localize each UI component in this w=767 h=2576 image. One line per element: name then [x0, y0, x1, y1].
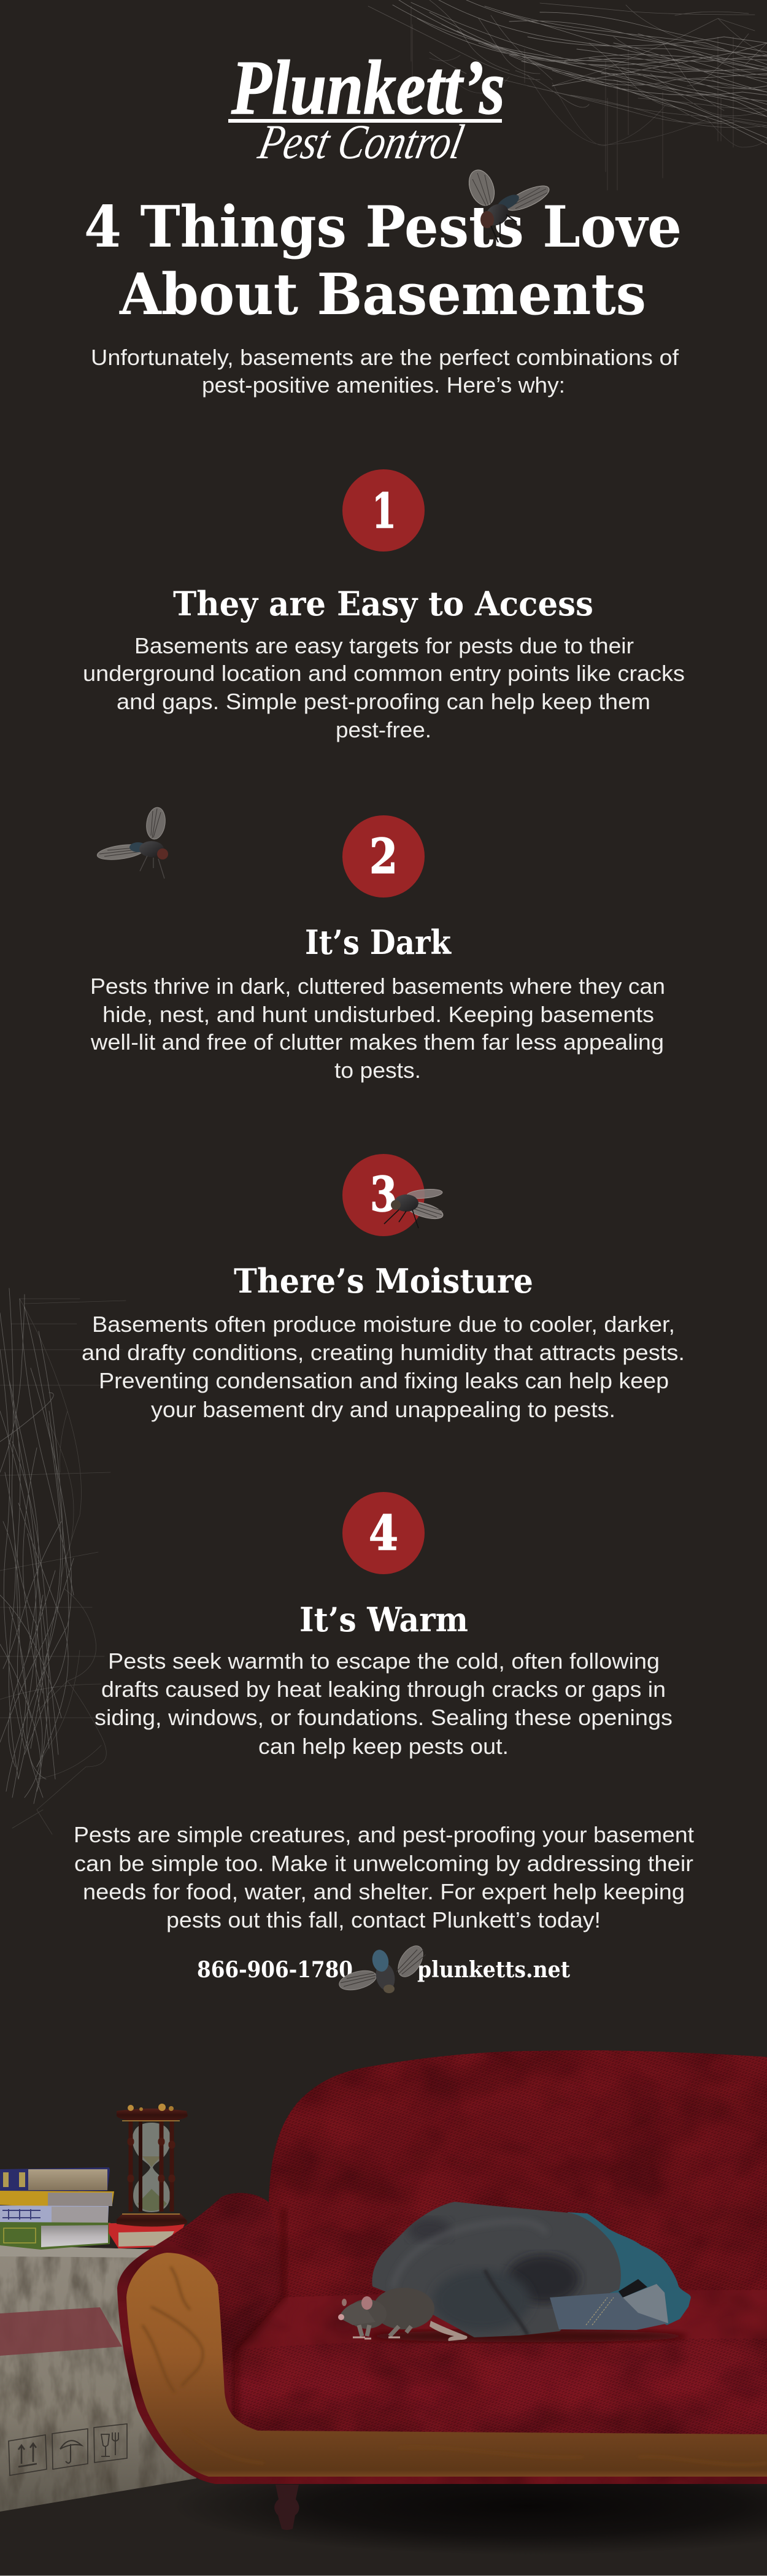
grey jacket	[372, 2202, 621, 2337]
body 3: your basement dry and unappealing to pests.	[151, 1397, 615, 1422]
contact website: plunketts.net	[417, 1957, 570, 1983]
body 1	[83, 633, 685, 742]
book: red	[109, 2223, 185, 2248]
contact phone: 866-906-1780	[197, 1957, 353, 1983]
body 1: Basements are easy targets for pests due to their	[134, 633, 634, 658]
icon: fly on title	[464, 166, 552, 242]
body 4: drafts caused by heat leaking through cracks or gaps in	[101, 1677, 666, 1702]
panel: reason 4	[94, 1492, 673, 1759]
number badge 3: 3	[370, 1167, 397, 1223]
sofa	[117, 2050, 767, 2530]
teal sweater	[568, 2212, 691, 2325]
closing text: pests out this fall, contact Plunkett’s today!	[166, 1907, 601, 1932]
number badge 4	[342, 1492, 425, 1574]
number badge 4: 4	[369, 1505, 398, 1561]
body 2: Pests thrive in dark, cluttered basements where they can	[90, 974, 665, 999]
heading 1: They are Easy to Access	[173, 584, 593, 623]
body 3: Basements often produce moisture due to cooler, darker,	[92, 1312, 675, 1337]
body 3: Preventing condensation and fixing leaks can help keep	[99, 1368, 669, 1393]
body 4: can help keep pests out.	[258, 1734, 509, 1759]
heading 4: It’s Warm	[299, 1600, 468, 1639]
book: yellow	[0, 2191, 114, 2207]
sofa back	[269, 2050, 767, 2313]
body 4	[94, 1648, 673, 1759]
body 2: well-lit and free of clutter makes them far less appealing	[90, 1029, 664, 1055]
heading 2: It’s Dark	[305, 923, 452, 962]
logo	[228, 45, 505, 169]
closing text: can be simple too. Make it unwelcoming by addressing their	[74, 1851, 693, 1876]
number badge 1: 1	[372, 483, 396, 539]
body 2: hide, nest, and hunt undisturbed. Keeping basements	[102, 1002, 654, 1027]
cobweb: left wall	[0, 1288, 126, 1834]
book: blue	[0, 2167, 110, 2192]
closing text	[74, 1822, 694, 1932]
logo: Pest Control	[253, 115, 468, 169]
body 3: and drafty conditions, creating humidity that attracts pests.	[82, 1340, 685, 1365]
pile of clothes	[368, 2202, 691, 2342]
number badge 3	[342, 1154, 425, 1236]
cobweb: top right	[368, 0, 767, 190]
title	[84, 193, 682, 328]
closing text: needs for food, water, and shelter. For expert help keeping	[83, 1879, 685, 1904]
title: 4 Things Pests Love	[84, 193, 682, 260]
number badge 1	[342, 469, 425, 552]
body 3	[82, 1312, 685, 1422]
sofa arm	[117, 2193, 767, 2484]
denim	[550, 2279, 668, 2330]
body 1: pest-free.	[336, 717, 431, 742]
intro text: pest-positive amenities. Here’s why:	[202, 372, 565, 398]
intro text: Unfortunately, basements are the perfect combinations of	[91, 345, 679, 370]
cardboard box	[0, 2245, 196, 2512]
icon: fly between contacts	[337, 1942, 428, 1994]
stack of books	[0, 2167, 185, 2250]
number badge 2	[342, 815, 425, 898]
number badge 2: 2	[369, 829, 398, 885]
body 2	[90, 974, 665, 1083]
book: lavender	[0, 2205, 109, 2225]
intro text	[91, 345, 679, 398]
bottom edge line	[0, 2575, 767, 2576]
title: About Basements	[119, 261, 646, 328]
sofa wooden frame	[126, 2253, 767, 2477]
rat	[338, 2288, 468, 2341]
hourglass	[117, 2104, 188, 2227]
logo: Plunkett’s	[231, 45, 505, 131]
sofa seat	[234, 2290, 767, 2434]
sofa leg	[274, 2485, 299, 2530]
icon: fly on badge 3	[384, 1188, 445, 1228]
closing text: Pests are simple creatures, and pest-proofing your basement	[74, 1822, 694, 1847]
box handling icons	[9, 2424, 127, 2475]
seat contact shadow	[368, 2330, 687, 2342]
panel: reason 3	[82, 1154, 685, 1422]
icon: fly beside reason 2	[96, 806, 168, 879]
panel: reason 2	[90, 815, 665, 1083]
body 4: siding, windows, or foundations. Sealing these openings	[94, 1705, 673, 1730]
panel: reason 1	[83, 469, 685, 742]
body 1: and gaps. Simple pest-proofing can help keep them	[117, 689, 650, 714]
box tape	[0, 2307, 122, 2356]
heading 3: There’s Moisture	[234, 1261, 533, 1301]
body 2: to pests.	[334, 1058, 421, 1083]
body 4: Pests seek warmth to escape the cold, often following	[108, 1648, 660, 1674]
body 1: underground location and common entry points like cracks	[83, 661, 685, 686]
book: green	[0, 2222, 110, 2250]
floor shadow	[172, 2457, 767, 2555]
